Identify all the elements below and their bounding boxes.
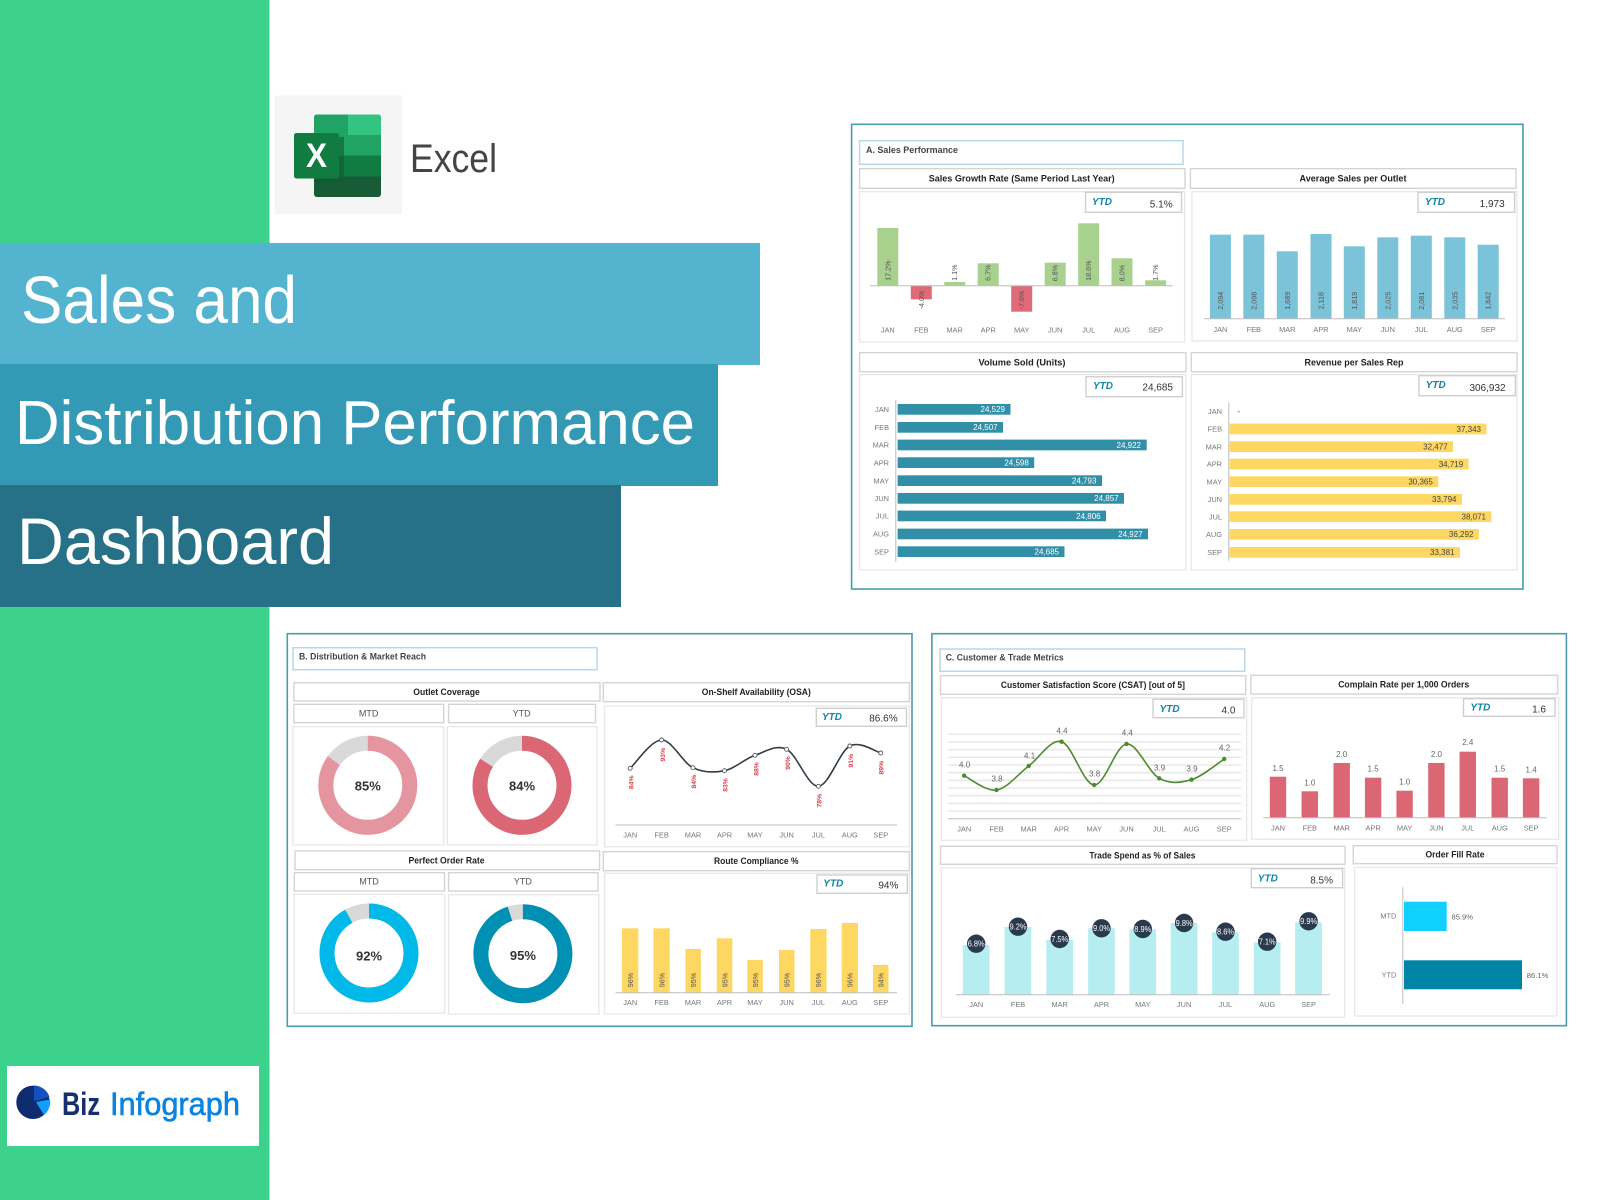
chart: Complain Rate: 2.0 [1431,750,1443,759]
chart: Sales Growth Rate [860,169,1185,342]
chart: Route Compliance: 95% [689,972,698,987]
heading: section B: B. Distribution & Market Reach [299,651,426,662]
chart: On-Shelf Availability: On-Shelf Availability (OSA) [702,687,811,698]
chart: Route Compliance: MAY [747,998,763,1007]
title band 2 [0,364,718,486]
chart: Trade Spend: Trade Spend as % of Sales [1089,850,1195,861]
chart: Trade Spend: 7.5% [1051,935,1068,944]
chart: Complain Rate: MAR [1333,824,1350,833]
chart: Revenue per Sales Rep: Revenue per Sales Rep [1304,358,1404,369]
chart: On-Shelf Availability: AUG [842,830,858,839]
chart: On-Shelf Availability [603,683,909,847]
Excel badge [275,96,497,214]
chart: Revenue per Sales Rep: JUN [1208,495,1222,504]
chart: Complain Rate: MAY [1397,824,1412,833]
chart: Perfect Order Rate donuts: Perfect Order Rate [408,855,484,866]
chart: Trade Spend: YTD [1258,874,1278,885]
chart: Volume Sold: APR [874,458,889,467]
chart: Sales Growth Rate: 1.1% [950,264,959,281]
title band 3: Dashboard [17,504,334,578]
chart: Trade Spend: 6.8% [968,940,985,949]
chart: Volume Sold: MAY [874,476,889,485]
chart: On-Shelf Availability: MAY [747,830,763,839]
chart: Complain Rate: JUL [1461,824,1474,833]
Biz Infograph logo [7,1066,259,1146]
chart: Sales Growth Rate: APR [981,326,996,335]
chart: Complain Rate: 1.5 [1494,765,1506,774]
chart: Revenue per Sales Rep: MAR [1206,442,1222,451]
chart: Sales Growth Rate: 6.8% [1051,264,1060,281]
donut: YTD 84%: 84% [509,779,535,794]
chart: Volume Sold: Volume Sold (Units) [978,358,1066,369]
chart: Average Sales per Outlet: 1,689 [1283,292,1292,310]
chart: Route Compliance [603,852,909,1014]
chart: Volume Sold: SEP [874,547,889,556]
chart: Complain Rate: 2.0 [1336,750,1348,759]
chart: CSAT: AUG [1183,825,1200,834]
chart: CSAT: FEB [989,825,1004,834]
chart: Revenue per Sales Rep: 33,381 [1430,548,1455,557]
chart: Revenue per Sales Rep: 32,477 [1423,442,1448,452]
chart: Sales Growth Rate: MAR [946,326,963,335]
chart: On-Shelf Availability: MAR [685,830,701,839]
chart: On-Shelf Availability: 84% [628,775,635,789]
chart: Trade Spend: AUG [1259,1000,1275,1009]
chart: Revenue per Sales Rep: FEB [1208,425,1222,434]
chart: On-Shelf Availability: 93% [660,748,667,762]
chart: Route Compliance: YTD [823,879,843,890]
chart: CSAT: 4.4 [1122,729,1133,738]
chart: Average Sales per Outlet: 1,842 [1484,292,1493,310]
chart: CSAT: APR [1054,825,1069,834]
chart: Revenue per Sales Rep: 33,794 [1432,495,1457,504]
chart: Trade Spend: APR [1094,1000,1109,1009]
chart: CSAT: YTD [1160,704,1180,715]
chart: CSAT: 4.2 [1219,743,1231,752]
chart: Trade Spend: 8.5% [1310,875,1333,886]
chart: CSAT: JUN [1119,825,1134,834]
chart: Route Compliance: JUN [779,998,794,1007]
chart: Average Sales per Outlet: MAR [1279,325,1296,334]
chart: Volume Sold: MAR [873,441,889,450]
chart: Complain Rate: FEB [1303,824,1317,833]
chart: On-Shelf Availability: 89% [879,761,886,775]
chart: Sales Growth Rate: JAN [881,326,895,335]
chart: Order Fill Rate: 85.9% [1452,912,1473,921]
chart: CSAT: 4.4 [1056,726,1068,735]
chart: Volume Sold: 24,793 [1072,477,1097,486]
chart: Trade Spend: SEP [1301,1000,1316,1009]
chart: Trade Spend: FEB [1011,1000,1025,1009]
chart: Average Sales per Outlet: 2,035 [1450,292,1459,310]
chart: Average Sales per Outlet: YTD [1425,197,1445,208]
chart: Route Compliance: SEP [873,998,888,1007]
chart: Sales Growth Rate: 1.7% [1151,264,1160,281]
chart: Trade Spend: MAR [1051,1000,1068,1009]
chart: Sales Growth Rate: AUG [1114,326,1130,335]
chart: Complain Rate [1251,675,1559,839]
chart: Volume Sold: 24,598 [1004,459,1029,468]
chart: Trade Spend: JUL [1219,1000,1232,1009]
green sidebar [0,0,270,1200]
chart: Order Fill Rate: 86.1% [1527,971,1549,980]
chart: Sales Growth Rate: JUN [1048,326,1062,335]
chart: Route Compliance: 95% [751,972,760,987]
chart: Average Sales per Outlet [1190,169,1517,341]
chart: Complain Rate: AUG [1492,824,1508,833]
chart: Route Compliance: JAN [623,998,637,1007]
chart: CSAT: 4.0 [959,760,971,769]
chart: On-Shelf Availability: 88% [754,762,761,776]
chart: Perfect Order Rate donuts [294,851,600,1014]
chart: Revenue per Sales Rep: 34,719 [1439,460,1464,469]
chart: CSAT: 3.9 [1154,764,1166,773]
chart: Volume Sold: 24,529 [981,405,1006,414]
chart: Sales Growth Rate: MAY [1014,326,1030,335]
chart: Route Compliance: 96% [626,972,635,987]
chart: Sales Growth Rate: 17.2% [883,260,892,281]
chart: Route Compliance: AUG [842,998,858,1007]
chart: Average Sales per Outlet: 2,094 [1216,292,1225,310]
chart: CSAT: MAY [1086,825,1102,834]
chart: Average Sales per Outlet: FEB [1247,325,1261,334]
chart: Average Sales per Outlet: JUL [1415,325,1428,334]
chart: On-Shelf Availability: JUN [779,830,794,839]
chart: Average Sales per Outlet: AUG [1447,325,1463,334]
chart: Complain Rate: 1.0 [1399,778,1411,787]
chart: On-Shelf Availability: JAN [623,830,637,839]
chart: Sales Growth Rate: JUL [1082,326,1095,335]
chart: Perfect Order Rate donuts: YTD [514,877,532,887]
chart: Trade Spend: JAN [969,1000,983,1009]
chart: Volume Sold: FEB [875,423,889,432]
chart: Sales Growth Rate: 5.1% [1150,200,1173,210]
chart: Complain Rate: 1.0 [1304,778,1316,787]
heading: section C [940,649,1245,671]
chart: Route Compliance: 94% [877,972,886,987]
chart: CSAT: 3.9 [1186,764,1198,773]
chart: Average Sales per Outlet: 2,098 [1249,292,1258,310]
chart: Volume Sold: JUN [875,494,889,503]
chart: Trade Spend: MAY [1135,1000,1151,1009]
chart: Sales Growth Rate: YTD [1092,197,1112,208]
Biz Infograph logo: Infograph [110,1086,240,1122]
chart: Trade Spend: 8.9% [1134,925,1151,934]
chart: CSAT: JUL [1153,825,1166,834]
chart: On-Shelf Availability: YTD [822,712,842,723]
chart: CSAT: SEP [1217,825,1232,834]
chart: Route Compliance: 95% [783,972,792,987]
chart: Average Sales per Outlet: SEP [1481,325,1496,334]
chart: Average Sales per Outlet: APR [1313,325,1329,334]
chart: Volume Sold: JUL [876,512,889,521]
chart: Trade Spend: 9.0% [1093,924,1110,933]
chart: Order Fill Rate: YTD [1382,970,1396,979]
chart: On-Shelf Availability: FEB [654,830,669,839]
chart: Complain Rate: SEP [1524,824,1539,833]
chart: Average Sales per Outlet: 1,819 [1350,292,1359,310]
chart: CSAT: 4.1 [1024,751,1036,760]
chart: CSAT: MAR [1020,825,1037,834]
chart: Revenue per Sales Rep: APR [1207,460,1222,469]
chart: Revenue per Sales Rep: JAN [1208,407,1222,416]
chart: Average Sales per Outlet: 2,118 [1317,292,1326,309]
chart: Sales Growth Rate: Sales Growth Rate (Same Period Last Year) [929,174,1115,185]
chart: Route Compliance: 94% [878,880,899,891]
chart: Average Sales per Outlet: Average Sales per Outlet [1300,174,1407,185]
chart: Sales Growth Rate: -4.0% [917,290,926,309]
chart: Outlet Coverage donuts: MTD [359,709,379,719]
chart: CSAT: 3.8 [1089,770,1101,779]
chart: Average Sales per Outlet: MAY [1347,325,1362,334]
chart: CSAT: 3.8 [991,774,1003,783]
chart: Order Fill Rate: MTD [1380,912,1396,921]
donut: YTD 84% [480,743,564,827]
chart: On-Shelf Availability: SEP [873,830,888,839]
chart: Route Compliance: 96% [658,972,667,987]
chart: Average Sales per Outlet: 2,025 [1383,292,1392,310]
chart: Complain Rate: APR [1365,824,1381,833]
chart: Revenue per Sales Rep: 38,071 [1462,512,1487,522]
chart: CSAT [940,676,1247,840]
chart: Complain Rate: JAN [1271,824,1285,833]
heading: section B [293,648,597,670]
chart: Route Compliance: 96% [846,972,855,987]
chart: Revenue per Sales Rep: YTD [1426,380,1446,391]
chart: Route Compliance: JUL [812,998,825,1007]
chart: Volume Sold: AUG [873,530,889,539]
donut: YTD 95% [481,912,565,996]
heading: section A: A. Sales Performance [866,145,958,156]
chart: Outlet Coverage donuts [293,683,600,845]
donut: MTD 92%: 92% [356,949,382,964]
chart: Complain Rate: 1.5 [1272,764,1284,773]
chart: Sales Growth Rate: SEP [1148,326,1163,335]
chart: Average Sales per Outlet: JAN [1213,325,1227,334]
chart: CSAT: 4.0 [1221,706,1236,717]
chart: Complain Rate: 1.4 [1526,765,1537,774]
chart: Revenue per Sales Rep: AUG [1206,530,1222,539]
chart: Revenue per Sales Rep: JUL [1209,512,1222,521]
chart: Order Fill Rate: Order Fill Rate [1426,850,1484,861]
chart: Route Compliance: FEB [654,998,669,1007]
Excel badge: Excel [410,137,497,181]
chart: Complain Rate: JUN [1429,824,1444,833]
chart: Outlet Coverage donuts: Outlet Coverage [413,687,480,698]
panel: B. Distribution & Market Reach [287,634,912,1026]
chart: Perfect Order Rate donuts: MTD [359,877,379,887]
chart: Complain Rate: 1.5 [1368,765,1379,774]
chart: Revenue per Sales Rep [1191,353,1517,570]
title band 3 [0,485,621,607]
chart: Route Compliance: APR [717,998,732,1007]
chart: Complain Rate: 2.4 [1462,738,1474,747]
chart: Revenue per Sales Rep: - [1237,407,1240,416]
chart: On-Shelf Availability: 86.6% [869,714,898,725]
chart: Trade Spend [940,846,1345,1017]
chart: Average Sales per Outlet: JUN [1381,325,1395,334]
chart: Volume Sold: 24,685 [1142,383,1173,394]
heading: section A [860,141,1183,164]
chart: On-Shelf Availability: APR [717,830,732,839]
chart: On-Shelf Availability: JUL [812,830,825,839]
donut: YTD 95%: 95% [510,948,536,963]
chart: Volume Sold: YTD [1093,381,1113,392]
chart: Volume Sold [860,353,1186,570]
heading: section C: C. Customer & Trade Metrics [946,653,1064,664]
chart: Complain Rate: Complain Rate per 1,000 Orders [1338,679,1469,690]
chart: Trade Spend: JUN [1177,1000,1191,1009]
chart: Trade Spend: 9.9% [1300,917,1317,926]
chart: Trade Spend: 7.1% [1259,938,1276,947]
chart: Trade Spend: 9.8% [1176,919,1193,928]
chart: On-Shelf Availability: 83% [722,778,729,792]
chart: Route Compliance: 96% [814,972,823,987]
title band 1 [0,243,760,365]
chart: Sales Growth Rate: 18.6% [1084,260,1093,281]
chart: Revenue per Sales Rep: SEP [1207,548,1222,557]
panel: C. Customer & Trade Metrics [932,634,1566,1026]
title band 2: Distribution Performance [15,389,695,458]
donut: MTD 85% [326,743,410,827]
chart: Revenue per Sales Rep: 36,292 [1449,530,1474,539]
chart: Route Compliance: MAR [685,998,701,1007]
chart: On-Shelf Availability: 78% [817,794,824,808]
chart: Sales Growth Rate: -7.6% [1017,290,1026,309]
chart: Route Compliance: 95% [720,972,729,987]
chart: Volume Sold: 24,922 [1117,441,1142,450]
chart: Volume Sold: 24,685 [1035,548,1060,557]
donut: MTD 92% [327,911,411,995]
chart: Order Fill Rate [1353,846,1557,1016]
chart: Revenue per Sales Rep: MAY [1207,477,1222,486]
chart: CSAT: JAN [957,825,971,834]
donut: MTD 85%: 85% [355,779,381,794]
title band 1: Sales and [21,263,297,338]
chart: Complain Rate: 1.6 [1532,704,1546,715]
chart: Volume Sold: 24,507 [973,423,998,432]
chart: Sales Growth Rate: FEB [914,326,929,335]
chart: Revenue per Sales Rep: 306,932 [1469,383,1506,394]
chart: Complain Rate: YTD [1470,703,1490,714]
chart: Volume Sold: JAN [875,405,889,414]
chart: Outlet Coverage donuts: YTD [513,709,531,719]
chart: On-Shelf Availability: 91% [848,754,855,768]
chart: Volume Sold: 24,927 [1118,530,1143,539]
chart: Route Compliance: Route Compliance % [714,856,799,867]
chart: On-Shelf Availability: 90% [785,756,792,770]
chart: Revenue per Sales Rep: 37,343 [1457,425,1482,434]
chart: CSAT: Customer Satisfaction Score (CSAT) [out of 5] [1001,680,1185,691]
chart: Average Sales per Outlet: 1,973 [1480,199,1505,210]
chart: Sales Growth Rate: 6.7% [984,264,993,281]
chart: Volume Sold: 24,857 [1094,494,1119,503]
chart: Trade Spend: 8.6% [1217,928,1234,937]
chart: Revenue per Sales Rep: 30,365 [1408,478,1433,486]
panel: A. Sales Performance [852,124,1523,589]
chart: On-Shelf Availability: 84% [691,775,698,789]
Excel badge: X [306,137,327,175]
chart: Volume Sold: 24,806 [1076,512,1101,521]
chart: Average Sales per Outlet: 2,081 [1417,292,1426,310]
chart: Trade Spend: 9.2% [1010,923,1026,932]
Biz Infograph logo: Biz [62,1086,100,1122]
chart: Sales Growth Rate: 8.0% [1118,264,1127,281]
